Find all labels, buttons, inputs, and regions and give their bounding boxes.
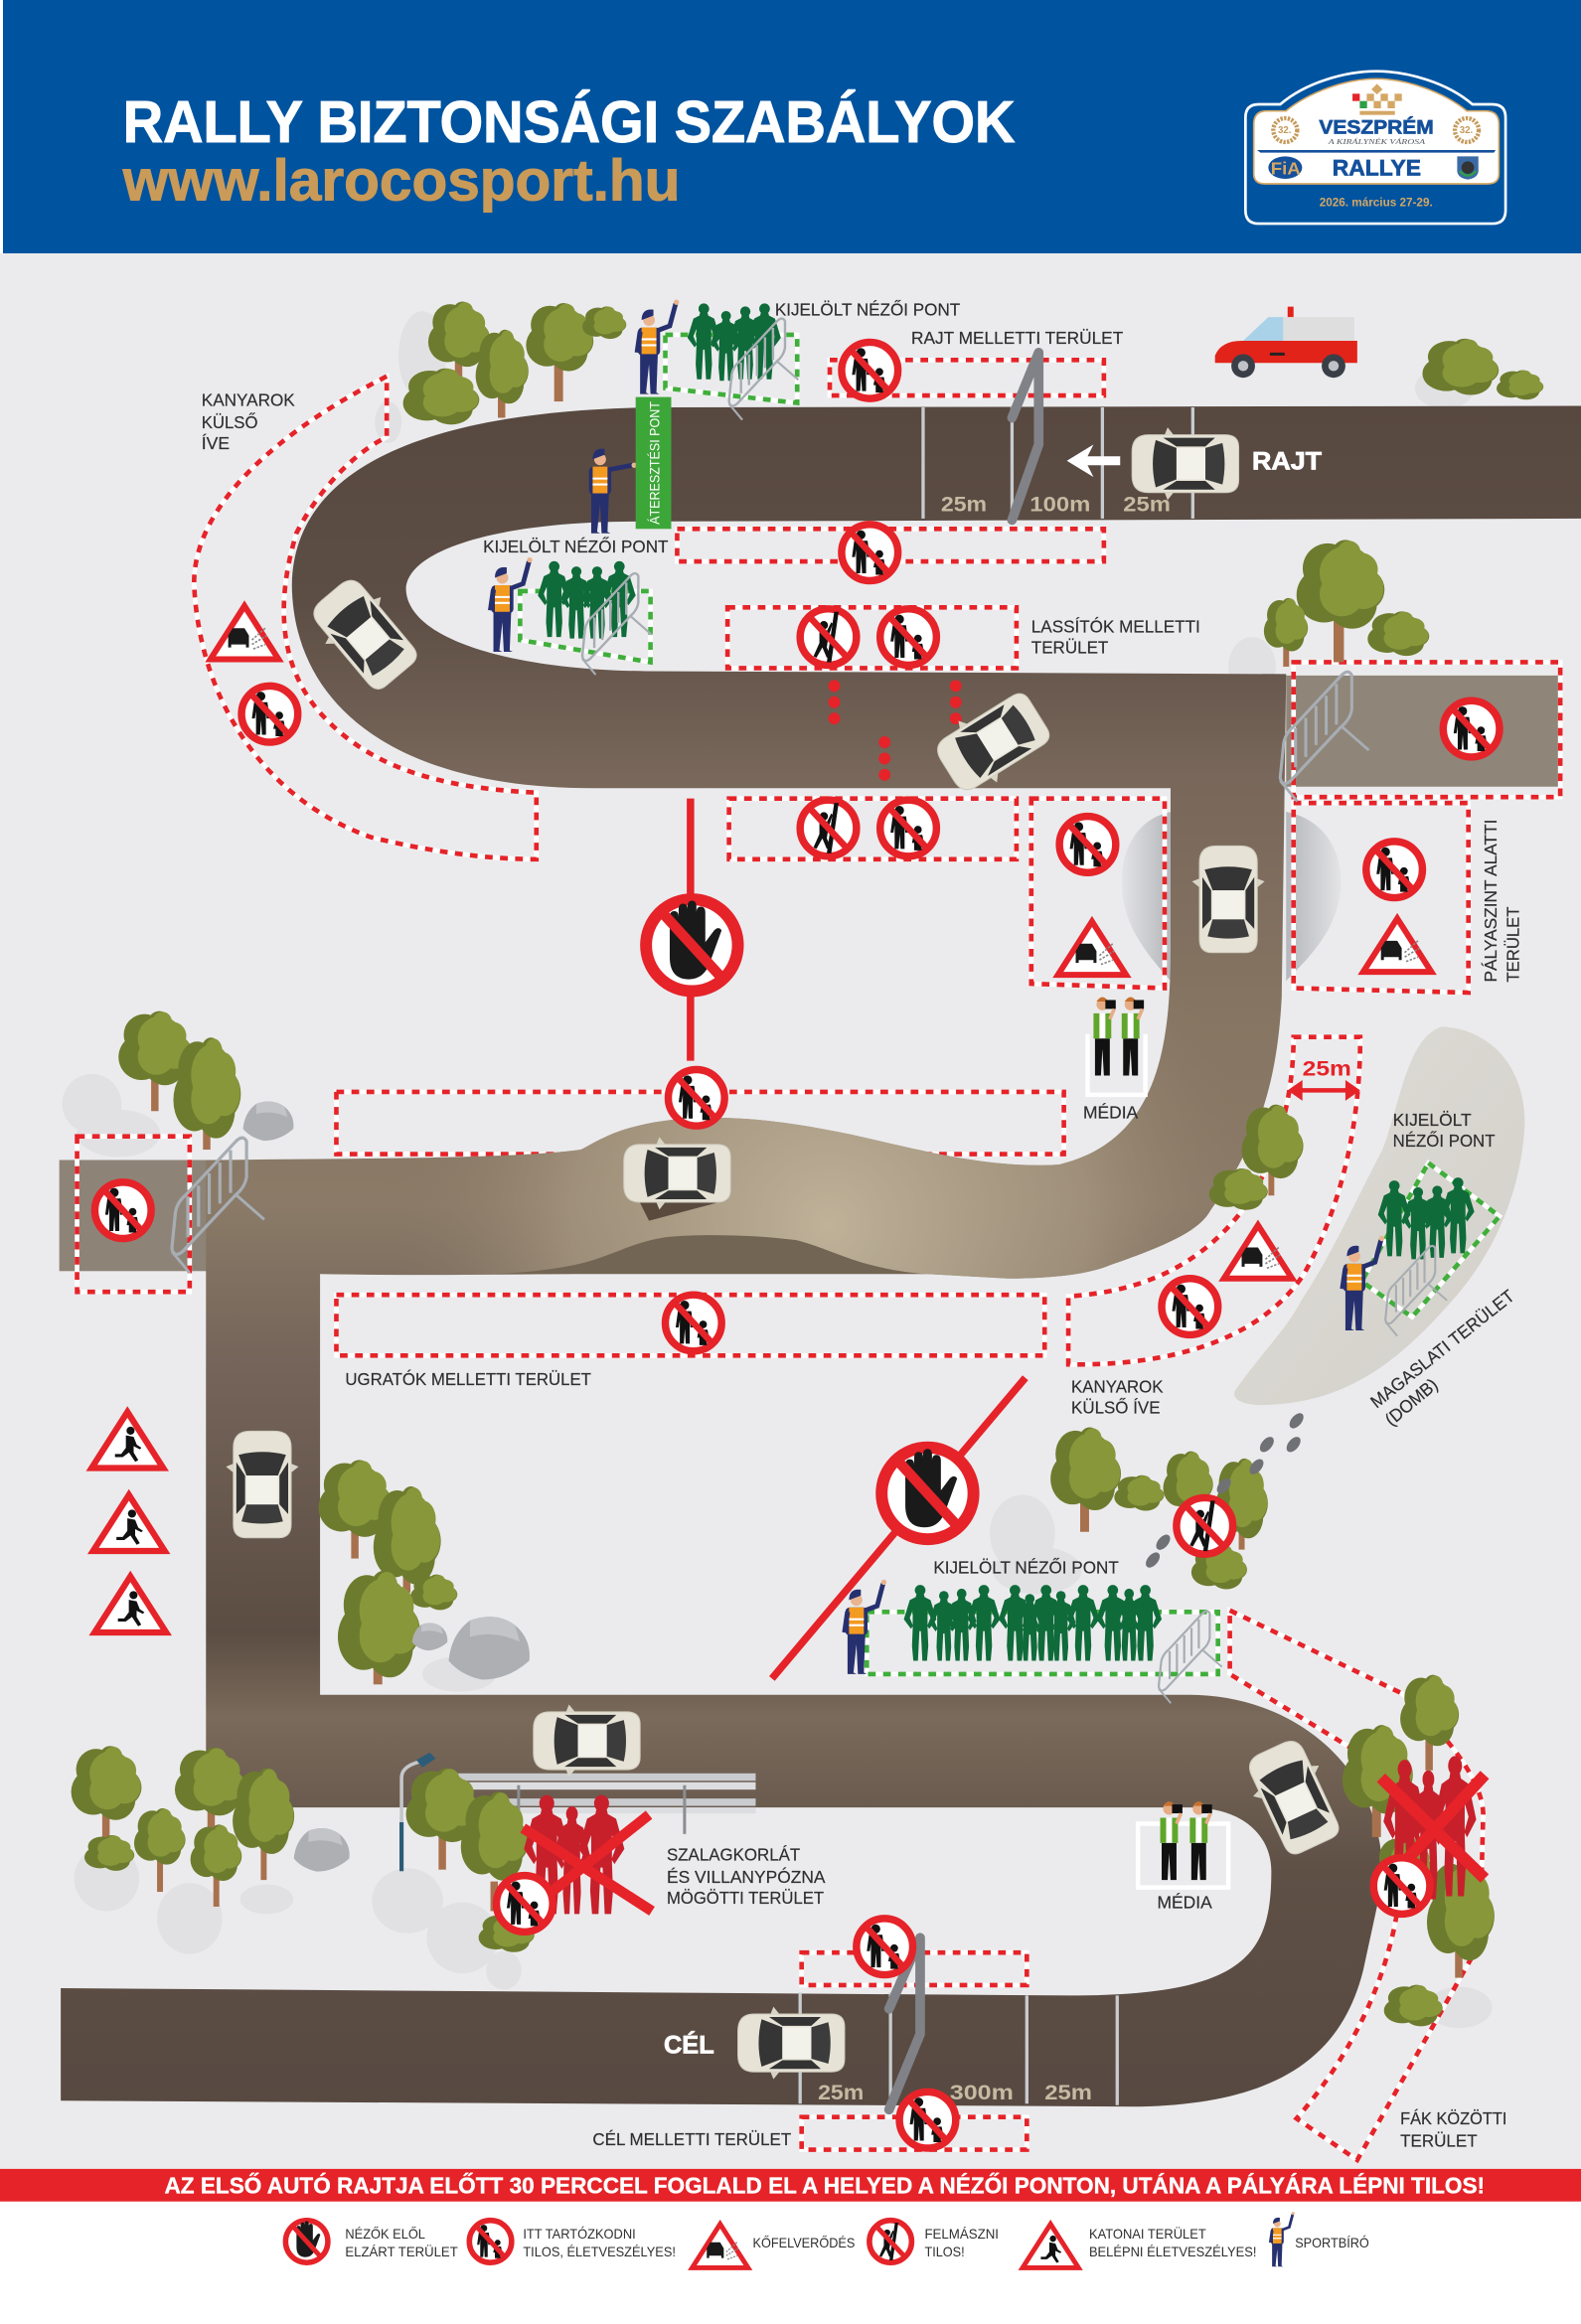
cars (226, 427, 1349, 2080)
legend: military area (1023, 2224, 1256, 2267)
legend: closed area: ELZÁRT TERÜLET (345, 2243, 458, 2260)
label: start: RAJT (1252, 449, 1322, 476)
map labels: PÁLYASZINT ALATTI (1481, 820, 1501, 983)
zone: closed road left outline (78, 1137, 190, 1292)
referees (491, 299, 1384, 1674)
map labels: ÉS VILLANYPÓZNA (667, 1866, 826, 1887)
trees top right (1422, 339, 1543, 399)
warning banner: AZ ELSŐ AUTÓ RAJTJA ELŐTT 30 PERCCEL FOGLALD EL A HELYED A NÉZŐI PONTON, UTÁNA A PÁLYÁRA LÉPNI TILOS! (165, 2171, 1485, 2198)
closed stub left (60, 1160, 208, 1271)
spectator zone 1 (666, 335, 797, 403)
red crossed crowd left (523, 1795, 652, 1914)
map labels: KANYAROK (202, 390, 295, 410)
barriers (172, 319, 1447, 1703)
map labels: SZALAGKORLÁT (667, 1845, 800, 1865)
passing point: ÁTERESZTÉSI PONT (647, 401, 664, 525)
red diagonal barrier line (772, 1378, 1026, 1678)
trees bottom left (72, 1746, 294, 1907)
map labels: (DOMB) (1381, 1374, 1442, 1430)
distance labels: 25m (941, 493, 987, 516)
legend: no climbing: FELMÁSZNI (924, 2226, 999, 2243)
trees top (403, 302, 626, 424)
road (61, 406, 1581, 2106)
map labels: NÉZŐI PONT (1393, 1130, 1496, 1151)
distance labels: 25m (1123, 493, 1171, 516)
distance labels: 100m (1029, 493, 1090, 516)
red crossed crowd right (1381, 1756, 1485, 1900)
crowd 4 (904, 1585, 1162, 1660)
crowd 1 (688, 303, 781, 381)
zone: finish lower (802, 2117, 1027, 2150)
media upper (1087, 997, 1146, 1095)
legend: marshal: SPORTBÍRÓ (1295, 2235, 1369, 2251)
zone: between trees (1230, 1611, 1484, 2160)
rally plate logo: 32. (1460, 125, 1473, 136)
rally plate logo: VESZPRÉM (1319, 115, 1434, 138)
map labels: UGRATÓK MELLETTI TERÜLET (345, 1368, 591, 1389)
underpass shadows (1122, 812, 1341, 981)
no-climb signs (800, 609, 1233, 1554)
red dots (829, 680, 962, 781)
road highlight at jump (61, 406, 1581, 2106)
map labels: KÜLSŐ (202, 411, 258, 432)
zone: finish upper (802, 1952, 1027, 1985)
ambulance (1215, 307, 1357, 378)
map labels: ÍVE (202, 433, 230, 453)
map labels: KIJELÖLT (1393, 1110, 1472, 1130)
trees behind rail (406, 1769, 535, 1952)
map labels: TERÜLET (1400, 2131, 1478, 2151)
map labels: MÖGÖTTI TERÜLET (667, 1888, 824, 1908)
map labels: RAJT MELLETTI TERÜLET (911, 328, 1123, 348)
zone: jump lower (336, 1295, 1044, 1355)
closed road right (1286, 676, 1560, 787)
trees right (1264, 540, 1429, 667)
rock warnings (211, 606, 1431, 1279)
lamp post (401, 1753, 435, 1871)
trees road bend (1209, 1105, 1304, 1210)
legend: no standing: TILOS, ÉLETVESZÉLYES! (523, 2244, 676, 2260)
map labels: MÉDIA (1158, 1892, 1212, 1912)
label: finish: CÉL (664, 2032, 714, 2060)
rock bottom left (294, 1828, 350, 1872)
zone: start side lower (677, 529, 1104, 561)
map labels: KIJELÖLT NÉZŐI PONT (775, 299, 960, 320)
rocks middle (412, 1617, 530, 1680)
legend: closed area: NÉZŐK ELŐL (345, 2226, 425, 2243)
passing point (636, 397, 671, 529)
warning banner (0, 2169, 1581, 2202)
distance labels (818, 493, 1171, 2104)
rally plate logo: A KIRÁLYNÉK VÁROSA (1327, 136, 1425, 146)
red vertical barrier line (688, 799, 693, 1061)
map labels: TERÜLET (1502, 906, 1522, 983)
hill (1234, 1026, 1524, 1405)
map labels: FÁK KÖZÖTTI (1400, 2108, 1506, 2128)
zone: closed road right outline (1294, 662, 1560, 797)
trees middle right (1050, 1428, 1268, 1589)
25m measure: 25m (1303, 1055, 1351, 1080)
car shadow at jump (639, 1200, 727, 1221)
map labels (202, 299, 1522, 2151)
jump shadow (497, 1235, 927, 1274)
road lines finish (800, 1992, 1117, 2105)
rally plate logo: FiA (1271, 158, 1301, 178)
title: RALLY BIZTONSÁGI SZABÁLYOK (123, 88, 1015, 155)
legend: no climbing (870, 2221, 999, 2262)
rally plate logo: RALLYE (1333, 156, 1421, 181)
tree shadows (63, 311, 1493, 2028)
military warnings (91, 1412, 166, 1632)
rock left (243, 1101, 293, 1141)
map labels: KIJELÖLT NÉZŐI PONT (933, 1556, 1119, 1577)
legend: flying stones (693, 2224, 855, 2267)
media lower (1138, 1801, 1228, 1888)
trees bottom right (1343, 1675, 1495, 2026)
zone: chicane upper (727, 607, 1017, 668)
legend: no climbing: TILOS! (924, 2245, 965, 2260)
guard rail (449, 1774, 755, 1834)
legend (285, 2212, 1369, 2267)
trees middle left (319, 1460, 457, 1684)
footprints (1143, 1411, 1306, 1570)
direction arrow (1067, 444, 1120, 477)
legend: no standing (469, 2221, 676, 2262)
zone: jump upper (336, 1092, 1064, 1155)
map labels: TERÜLET (1031, 638, 1108, 658)
legend: military area: KATONAI TERÜLET (1089, 2225, 1206, 2243)
zone: start side upper (830, 360, 1104, 395)
distance labels: 300m (950, 2082, 1014, 2104)
zone: bend outer 25m (1068, 1037, 1360, 1364)
map labels: KÜLSŐ ÍVE (1071, 1396, 1161, 1417)
map labels: KIJELÖLT NÉZŐI PONT (483, 536, 669, 556)
website url: www.larocosport.hu (122, 148, 680, 213)
spectator zone 4 (867, 1612, 1218, 1674)
rally plate logo (1245, 72, 1505, 224)
rally plate logo: 2026. március 27-29. (1320, 196, 1433, 210)
map labels: LASSÍTÓK MELLETTI (1031, 616, 1200, 637)
map labels: MÉDIA (1083, 1103, 1138, 1123)
map labels: KANYAROK (1071, 1377, 1164, 1397)
zone: underpass left (1031, 799, 1165, 989)
road lines start (923, 407, 1192, 519)
distance labels: 25m (818, 2082, 864, 2104)
25m measure (1288, 1055, 1360, 1101)
map labels: MAGASLATI TERÜLET (1366, 1286, 1518, 1412)
start gantry (1012, 353, 1038, 520)
zone: outer bend left (194, 377, 537, 859)
map labels: CÉL MELLETTI TERÜLET (592, 2129, 791, 2149)
legend: military area: BELÉPNI ÉLETVESZÉLYES! (1089, 2244, 1256, 2260)
rally plate logo: 32. (1278, 125, 1292, 136)
crowd 2 (538, 561, 636, 639)
distance labels: 25m (1044, 2082, 1092, 2104)
no-stand signs (94, 342, 1500, 2148)
legend: closed area (285, 2221, 458, 2262)
trees left (118, 1011, 240, 1150)
zone: underpass right (1294, 803, 1469, 993)
spectator zone 3 hill (1361, 1162, 1500, 1317)
legend: marshal (1270, 2212, 1369, 2266)
header band (3, 0, 1581, 253)
big no-entry signs (646, 899, 974, 1539)
legend: no standing: ITT TARTÓZKODNI (523, 2226, 636, 2243)
crowd 3 (1378, 1177, 1475, 1259)
finish gantry (889, 1937, 920, 2109)
spectator zone 2 (520, 591, 651, 662)
zone: chicane lower (729, 799, 1017, 859)
legend: flying stones: KŐFELVERŐDÉS (752, 2235, 855, 2251)
